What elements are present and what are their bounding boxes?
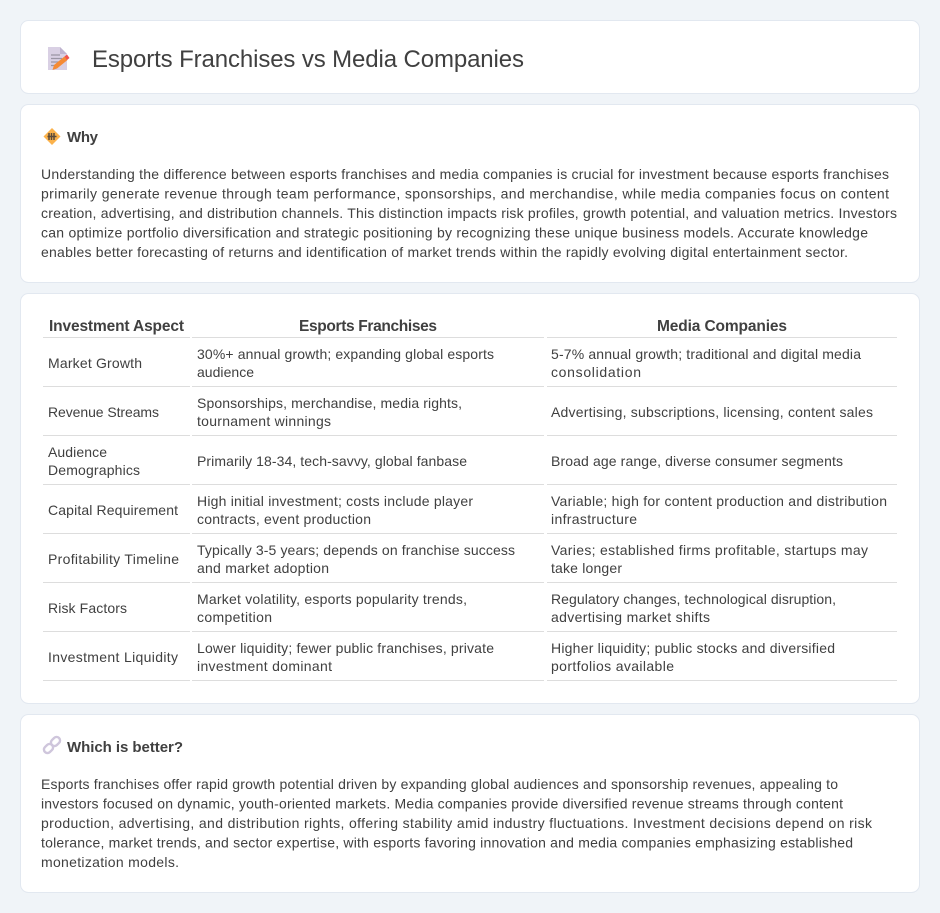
text: why paragraph: enables better forecasting of returns and identification of market trends within the rapidly evolving digital entertainment sector.: [41, 244, 848, 260]
row: market growth: 30%+ annual growth; expanding global esports: [197, 346, 494, 362]
row: profitability timeline: [48, 542, 868, 576]
panel: comparison table: [20, 294, 920, 704]
row: audience demographics: Demographics: [48, 462, 140, 478]
icon: document with pencil: [48, 47, 70, 70]
row: capital requirement: [48, 493, 887, 527]
panel: title header: [20, 20, 920, 94]
row: investment liquidity: Higher liquidity; public stocks and diversified: [551, 640, 835, 656]
row: capital requirement: contracts, event production: [197, 511, 371, 527]
text: why paragraph: can optimize portfolio diversification and strategic positioning by recognizing these unique business models. Accurate knowledge: [41, 224, 868, 240]
row: investment liquidity: Investment Liquidity: [48, 649, 178, 665]
row: market growth: 5-7% annual growth; traditional and digital media: [551, 346, 861, 362]
heading: why: Why: [67, 129, 99, 146]
row: risk factors: [48, 591, 836, 625]
text: which is better paragraph: tolerance, market trends, and sector expertise, with esports favoring innovation and media companies emphasizing established: [41, 834, 853, 850]
text: why paragraph: [41, 166, 897, 260]
panel: which is better: [20, 714, 920, 892]
icon: chain link: [42, 735, 62, 755]
text: why paragraph: primarily generate revenue through team performance, sponsorships, and merchandise, while media companies focus on content: [41, 186, 889, 202]
row: revenue streams: [48, 395, 873, 429]
row: market growth: audience: [197, 364, 254, 380]
table header: Media Companies: [657, 318, 787, 335]
row: risk factors: Risk Factors: [48, 600, 127, 616]
row: investment liquidity: investment dominant: [197, 658, 332, 674]
row: capital requirement: Capital Requirement: [48, 502, 178, 518]
table header: Esports Franchises: [299, 318, 437, 335]
row: capital requirement: High initial investment; costs include player: [197, 493, 473, 509]
row: revenue streams: tournament winnings: [197, 413, 331, 429]
row: investment liquidity: [48, 640, 835, 674]
row: profitability timeline: Profitability Timeline: [48, 551, 179, 567]
row: market growth: Market Growth: [48, 355, 142, 371]
panel: why: [20, 104, 920, 282]
row: revenue streams: Advertising, subscriptions, licensing, content sales: [551, 404, 873, 420]
row: audience demographics: Primarily 18-34, tech-savvy, global fanbase: [197, 453, 467, 469]
row: market growth: [48, 346, 861, 380]
row: audience demographics: Audience: [48, 444, 107, 460]
text: which is better paragraph: production, advertising, and distribution rights, offering stability amid industry fluctuations. Investment decisions depend on risk: [41, 815, 873, 831]
text: why paragraph: Understanding the difference between esports franchises and media companies is crucial for investment because esports franchises: [41, 166, 889, 182]
text: why paragraph: creation, advertising, and distribution channels. This distinction impacts risk profiles, growth potential, and valuation metrics. Investors: [41, 205, 897, 221]
text: which is better paragraph: Esports franchises offer rapid growth potential driven by expanding global audiences and sponsorship revenues, appealing to: [41, 776, 838, 792]
title: Esports Franchises vs Media Companies: [92, 46, 524, 73]
row: risk factors: Regulatory changes, technological disruption,: [551, 591, 836, 607]
row: profitability timeline: Varies; established firms profitable, startups may: [551, 542, 868, 558]
row: capital requirement: infrastructure: [551, 511, 637, 527]
text: which is better paragraph: [41, 776, 873, 870]
row: risk factors: competition: [197, 609, 272, 625]
row: investment liquidity: portfolios available: [551, 658, 674, 674]
row: audience demographics: Broad age range, diverse consumer segments: [551, 453, 843, 469]
row: profitability timeline: Typically 3-5 years; depends on franchise success: [197, 542, 515, 558]
row: capital requirement: Variable; high for content production and distribution: [551, 493, 887, 509]
table header: Investment Aspect: [49, 318, 184, 335]
text: which is better paragraph: monetization models.: [41, 854, 179, 870]
row: market growth: consolidation: [551, 364, 641, 380]
icon: warning diamond: [44, 128, 60, 145]
row: revenue streams: Sponsorships, merchandise, media rights,: [197, 395, 462, 411]
row: risk factors: advertising market shifts: [551, 609, 710, 625]
row: profitability timeline: take longer: [551, 560, 622, 576]
table header: [49, 318, 787, 335]
row: audience demographics: [48, 444, 843, 478]
row: profitability timeline: and market adoption: [197, 560, 329, 576]
heading: which is better: Which is better?: [67, 739, 183, 756]
row: risk factors: Market volatility, esports popularity trends,: [197, 591, 467, 607]
row: investment liquidity: Lower liquidity; fewer public franchises, private: [197, 640, 494, 656]
text: which is better paragraph: investors focused on dynamic, youth-oriented markets. Media companies provide diversified revenue streams through content: [41, 796, 843, 812]
row: revenue streams: Revenue Streams: [48, 404, 159, 420]
